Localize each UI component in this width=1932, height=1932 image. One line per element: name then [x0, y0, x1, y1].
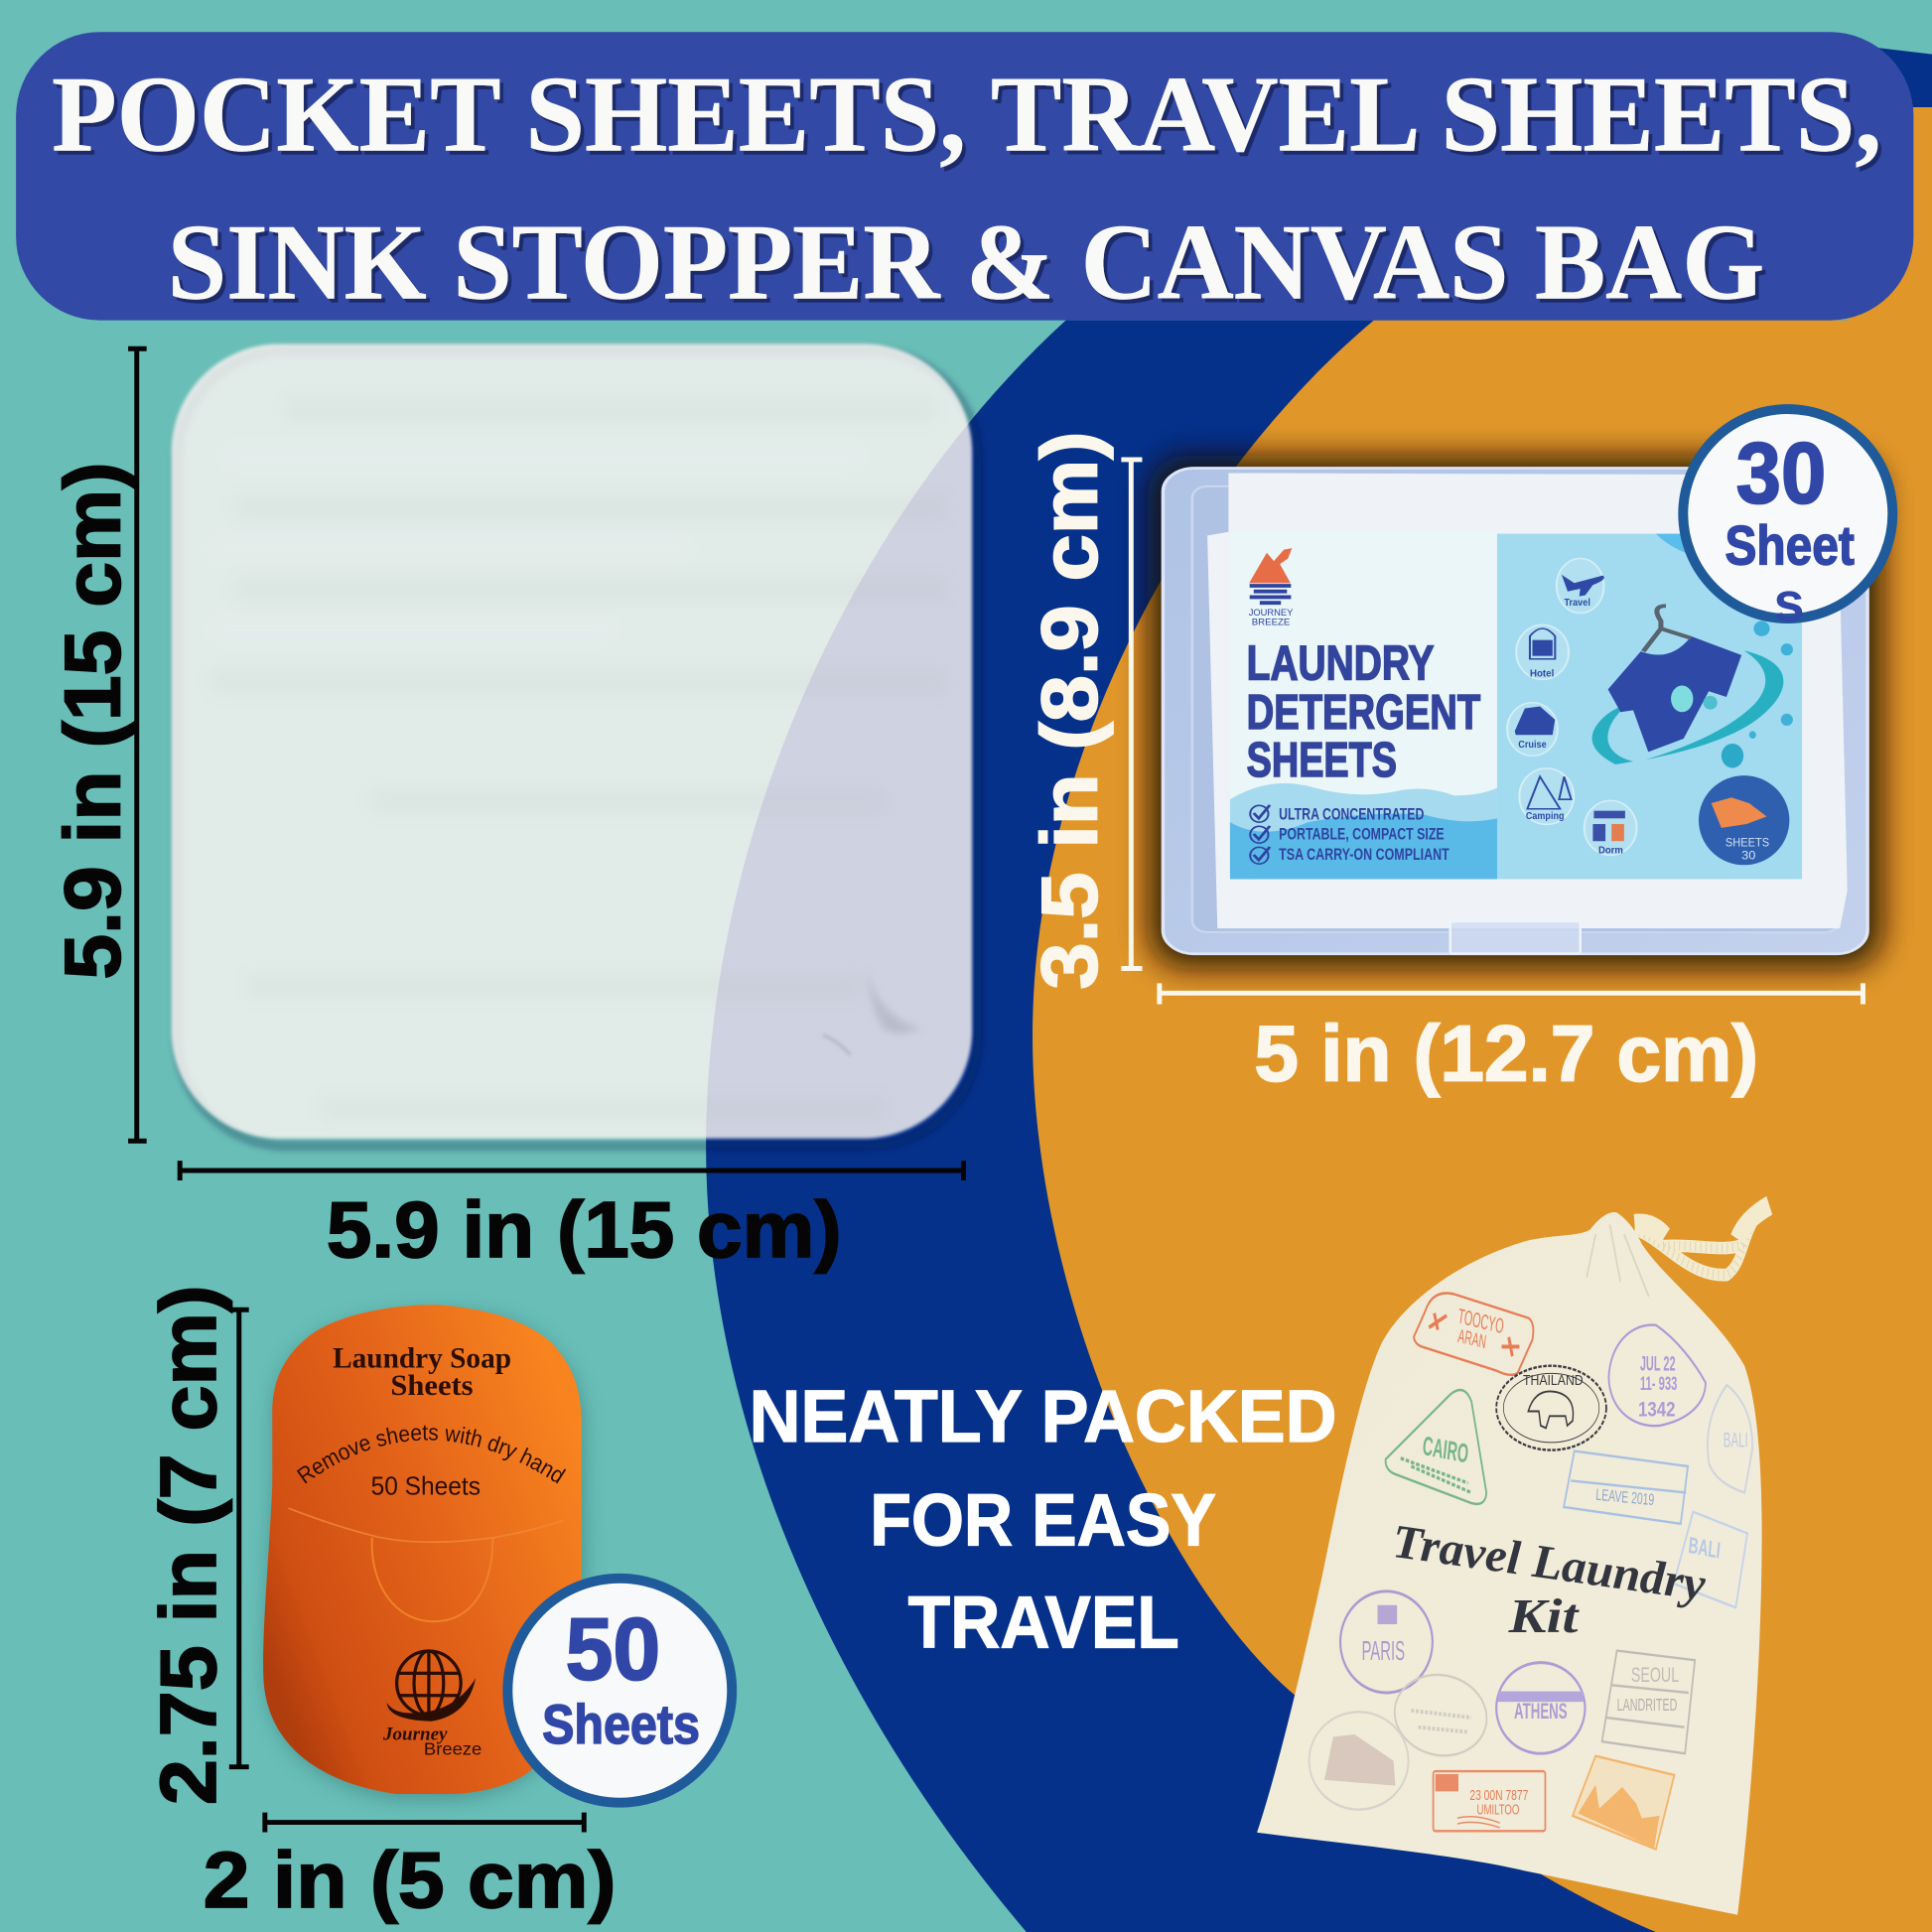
badge: 30 sheets: Sheet [1725, 513, 1855, 576]
dimension: pocket sheet width label: 5.9 in (15 cm) [327, 1185, 842, 1274]
case clasp [1450, 921, 1581, 953]
sheet count badge [1699, 775, 1789, 865]
label: left white panel [1230, 532, 1497, 879]
label waves [1230, 783, 1497, 879]
stamp: Bali rectangle [1674, 1512, 1747, 1607]
bag title [1391, 1515, 1708, 1644]
dimension: box height label: 3.5 in (8.9 cm) [1026, 431, 1114, 990]
badge: 30 sheets: 30 [1736, 425, 1826, 521]
case title: Laundry Soap [333, 1342, 511, 1375]
soap sheets case [263, 1305, 582, 1794]
label benefits [1250, 805, 1449, 864]
t-shirt illustration [1592, 606, 1793, 767]
dimension: box width label: 5 in (12.7 cm) [1254, 1009, 1758, 1097]
logo wordmark: Breeze [424, 1738, 482, 1758]
use icon glyphs and labels [1515, 575, 1625, 856]
title text [52, 54, 1881, 322]
badge: 50 sheets: 50 [566, 1599, 660, 1699]
background: navy corner at top right [1849, 45, 1932, 107]
label heading: SHEETS [1247, 734, 1397, 787]
badge: 50 sheets [507, 1579, 732, 1803]
stamp: Paris [1340, 1591, 1433, 1693]
stamp: Tokyo: ARAN [1456, 1325, 1487, 1353]
background: navy curved band [706, 321, 1932, 1932]
logo wordmark [382, 1724, 482, 1758]
callout: neatly packed: FOR EASY [870, 1478, 1216, 1561]
dimension: box height line [1121, 460, 1142, 968]
stamp: blue visa: LEAVE 2019 [1595, 1486, 1655, 1510]
globe logo [387, 1651, 476, 1722]
stamp: grey oval [1392, 1670, 1489, 1760]
case title: Sheets [390, 1369, 474, 1402]
plastic case [1163, 468, 1867, 954]
title text: POCKET SHEETS, TRAVEL SHEETS, [52, 54, 1881, 174]
use icon glyphs and labels: Hotel [1530, 668, 1554, 679]
callout: neatly packed: NEATLY PACKED [750, 1375, 1337, 1457]
dimension: pocket sheet width line [180, 1161, 964, 1180]
callout: neatly packed: TRAVEL [908, 1581, 1179, 1663]
stamp: date [1608, 1325, 1706, 1426]
curved instruction: Remove sheets with dry hand [296, 1426, 566, 1483]
bag title: Kit [1507, 1590, 1580, 1644]
stamp: Bali oval: BALI [1724, 1428, 1748, 1451]
stamp: Seoul: SEOUL [1631, 1663, 1679, 1686]
stamp: Seoul [1602, 1651, 1695, 1753]
stamp: orange entry [1434, 1771, 1545, 1831]
folded white sheets [1207, 473, 1848, 928]
stamp: Athens: ATHENS [1514, 1700, 1568, 1725]
stamp: Thailand [1496, 1366, 1606, 1450]
dimension: box width line [1160, 983, 1863, 1004]
stamp: Thailand: THAILAND [1523, 1371, 1584, 1388]
stamp: date: JUL 22 [1640, 1351, 1676, 1375]
sheet count badge: 30 [1741, 849, 1755, 863]
travel sheets box [1163, 468, 1867, 954]
stamp: orange entry: 23 00N 7877 [1469, 1786, 1528, 1803]
bag title: Travel Laundry [1391, 1515, 1708, 1612]
dimension: pocket sheet height line [128, 348, 147, 1141]
title text: SINK STOPPER & CANVAS BAG [168, 202, 1764, 322]
label benefits: ULTRA CONCENTRATED [1279, 805, 1424, 824]
dimension: soap case height label: 2.75 in (7 cm) [144, 1285, 232, 1805]
drawstring rope [1634, 1205, 1769, 1275]
badge: 30 sheets [1683, 409, 1892, 633]
travel sheets box shadow [1149, 456, 1882, 968]
gathered folds [1587, 1224, 1649, 1297]
badge: 30 sheets: s [1774, 570, 1805, 632]
label benefits: TSA CARRY-ON COMPLIANT [1279, 845, 1449, 864]
stamp: colosseum [1310, 1712, 1409, 1810]
stamp: Athens [1496, 1663, 1585, 1753]
background: orange curved area [1033, 107, 1932, 1932]
label heading [1247, 636, 1480, 787]
use icon glyphs and labels: Travel [1564, 598, 1590, 609]
label benefits: PORTABLE, COMPACT SIZE [1279, 825, 1445, 844]
canvas drawstring bag [1257, 1205, 1769, 1915]
brand logo [1249, 548, 1293, 627]
use icons [1507, 558, 1637, 855]
stamp: Tokyo [1414, 1293, 1533, 1375]
stamp: Taj Mahal [1573, 1756, 1674, 1850]
label heading: DETERGENT [1247, 686, 1480, 740]
stamp: date: 1342 [1638, 1397, 1676, 1421]
label heading: LAUNDRY [1247, 636, 1435, 690]
use icon glyphs and labels: Camping [1526, 811, 1564, 822]
stamp: Seoul: LANDRITED [1617, 1696, 1677, 1715]
sheet count on case: 50 Sheets [371, 1472, 481, 1500]
logo wordmark: Journey [382, 1724, 448, 1744]
dimension: pocket sheet height label: 5.9 in (15 cm) [48, 462, 136, 980]
brand logo: JOURNEY [1249, 608, 1293, 618]
callout: neatly packed [750, 1375, 1337, 1663]
pocket sheet: large translucent square [172, 344, 978, 1146]
label: right blue panel [1497, 534, 1802, 879]
stamp: Cairo [1386, 1390, 1486, 1504]
dimension: soap case height line [229, 1310, 249, 1767]
stamp: Tokyo: TOOCYO [1456, 1304, 1505, 1338]
brand logo: BREEZE [1252, 618, 1290, 627]
soap sheets case shadow [265, 1311, 586, 1799]
use icon glyphs and labels: Dorm [1598, 845, 1623, 856]
use icon glyphs and labels: Cruise [1518, 740, 1547, 751]
dimension: soap case width label: 2 in (5 cm) [204, 1836, 617, 1924]
stamp: Paris: PARIS [1361, 1636, 1405, 1667]
sheet count badge: SHEETS [1725, 836, 1769, 850]
badge: 50 sheets: Sheets [542, 1693, 700, 1755]
bag body [1257, 1212, 1762, 1915]
stamp: date: 11- 933 [1640, 1373, 1677, 1394]
lid edge and thumb notch [288, 1508, 563, 1542]
title banner [16, 32, 1913, 322]
case title [333, 1342, 511, 1402]
stamp: Cairo: CAIRO [1421, 1431, 1470, 1469]
stamp: Bali rectangle: BALI [1687, 1534, 1722, 1564]
dimension: soap case width line [265, 1813, 584, 1832]
stamp: orange entry: UMILTOO [1477, 1801, 1519, 1818]
stamp: Bali oval [1708, 1385, 1752, 1492]
stamp: blue visa [1564, 1451, 1688, 1524]
